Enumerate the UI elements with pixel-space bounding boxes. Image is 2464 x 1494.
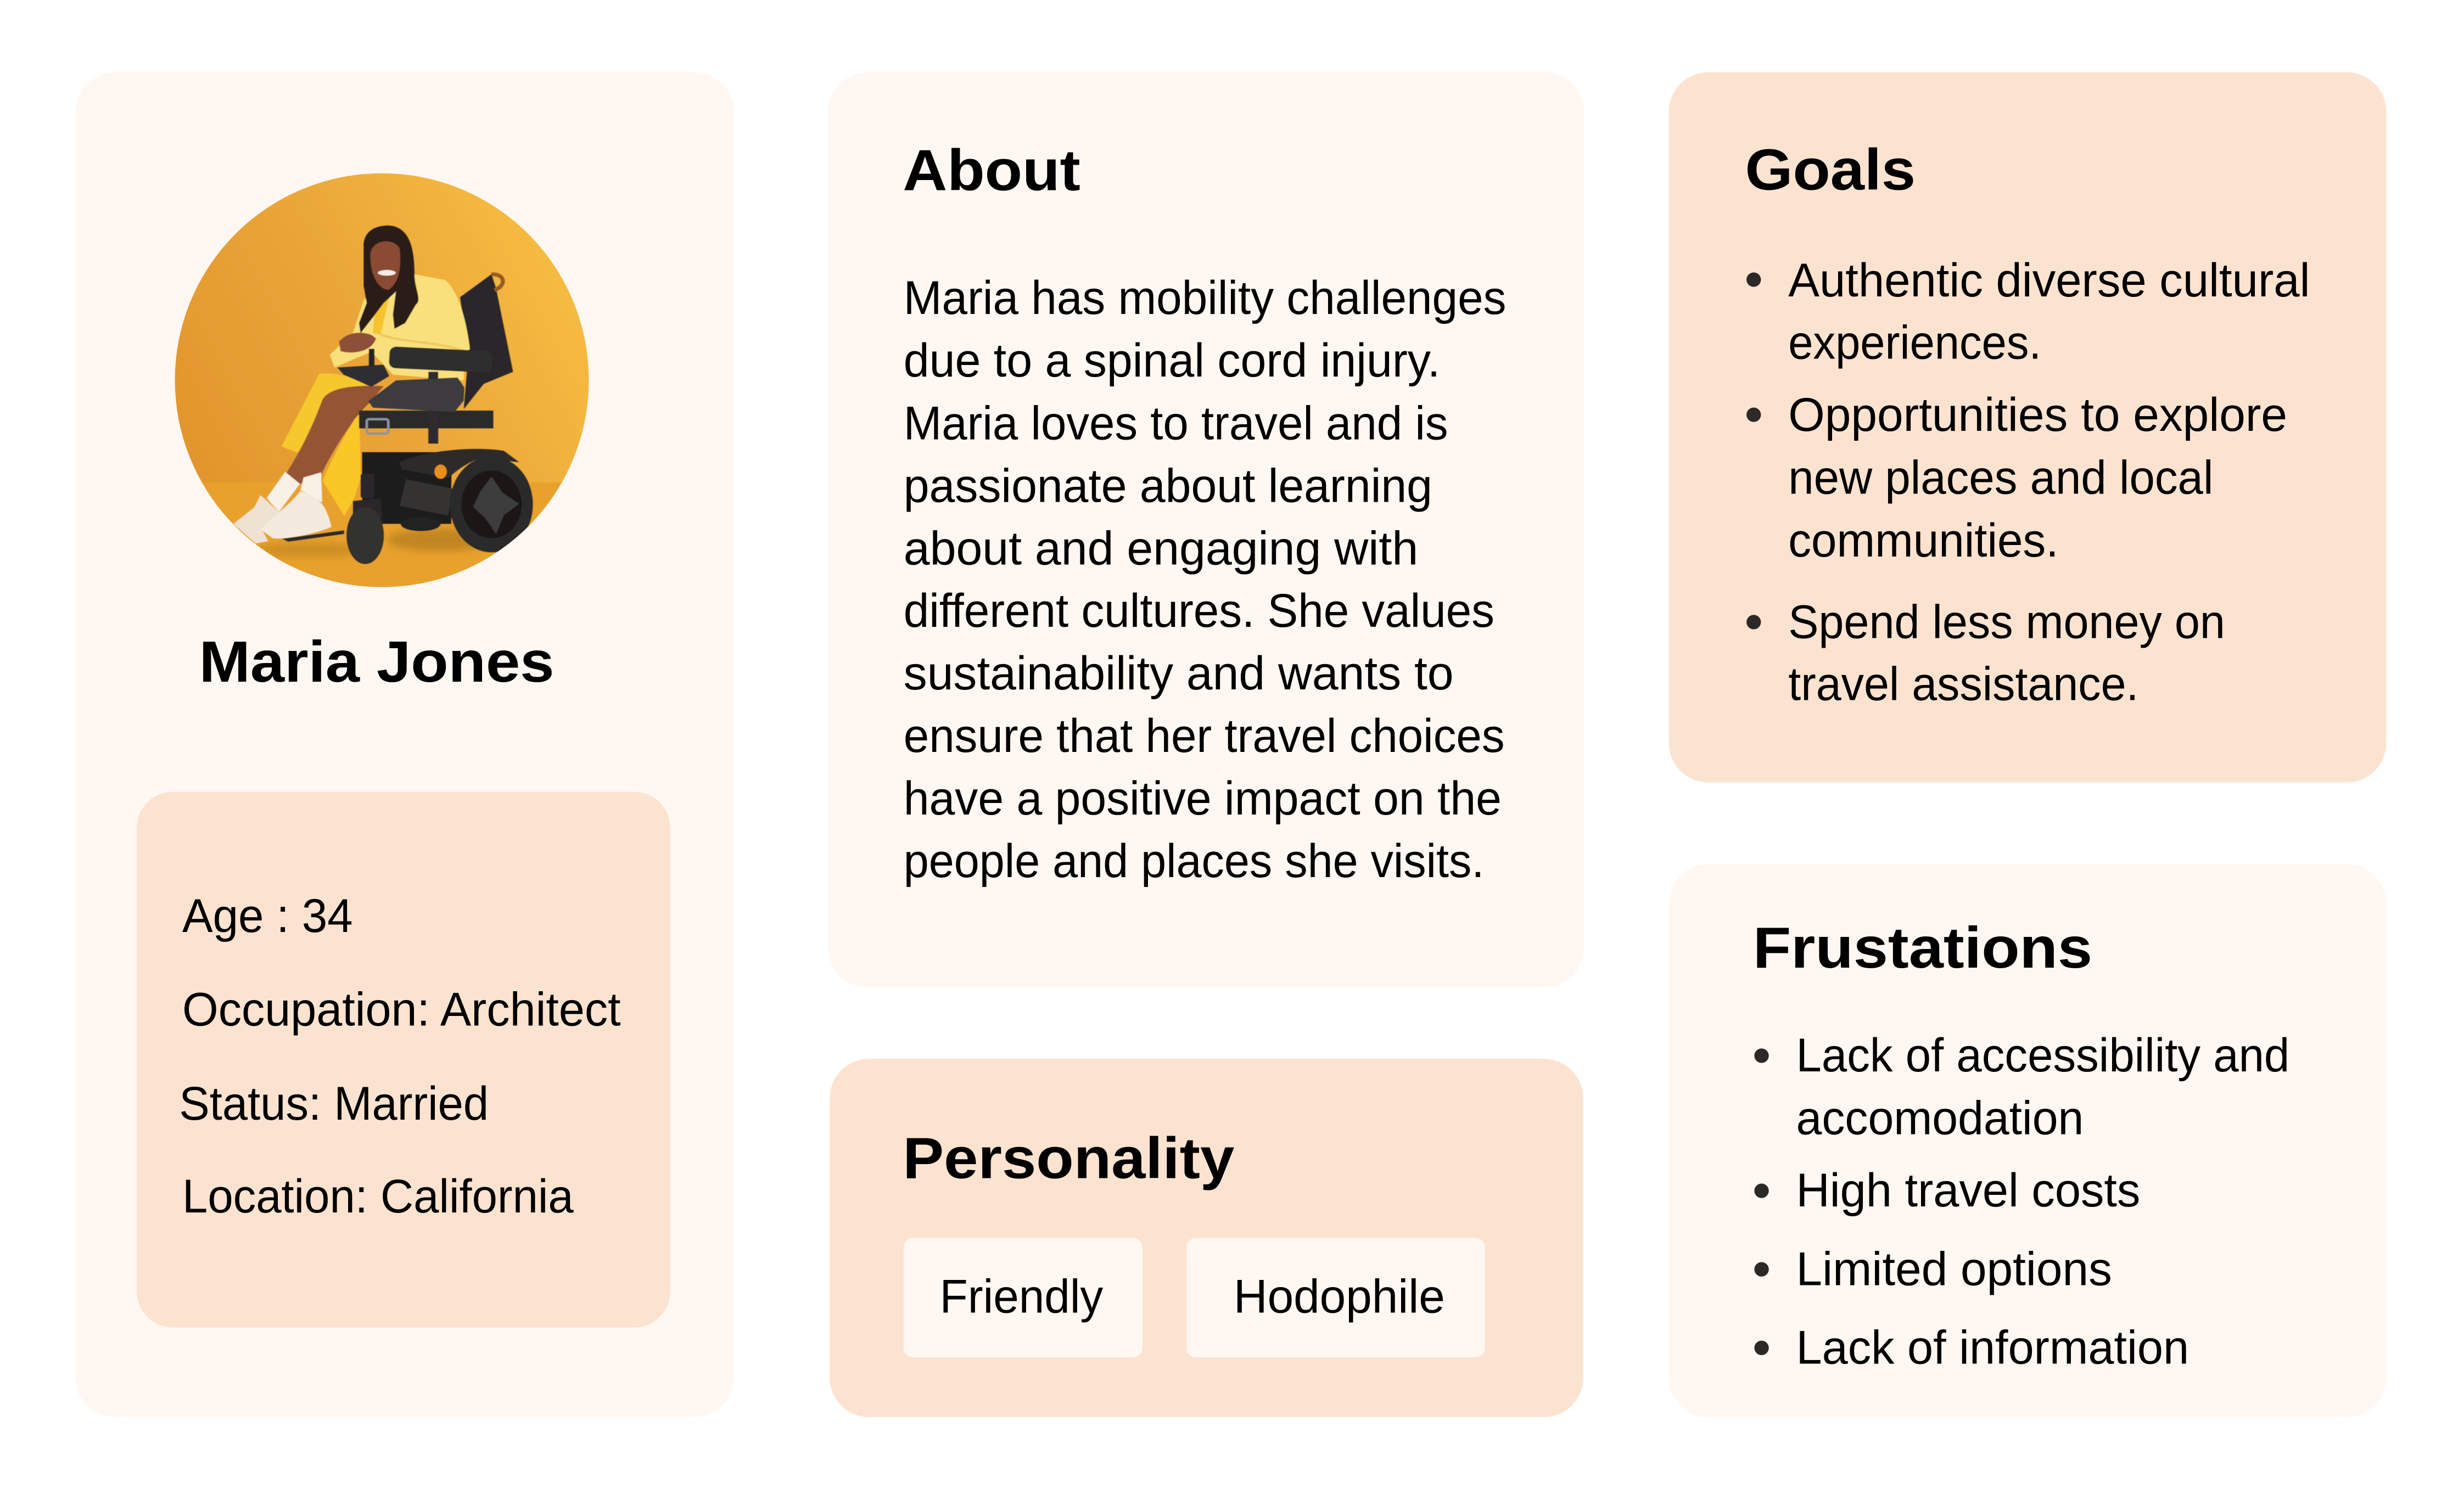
about paragraph: Maria has mobility challenges (904, 272, 1506, 324)
goal: explore: Opportunities to explore (1788, 389, 2287, 441)
tag: hodophile (1186, 1238, 1485, 1357)
frustration: information: Lack of information (1796, 1321, 2189, 1374)
tag: hodophile: Hodophile (1234, 1271, 1445, 1323)
about paragraph (904, 272, 1506, 888)
location: Location: California (182, 1170, 574, 1223)
about paragraph: due to a spinal cord injury. (904, 334, 1440, 387)
goal: cultural experiences (1746, 254, 2310, 369)
frustrations heading: Frustations (1753, 916, 2092, 980)
occupation: Occupation: Architect (182, 983, 621, 1036)
name: Maria Jones (199, 630, 555, 694)
goal: spend less (1746, 596, 2225, 710)
status: Status: Married (179, 1077, 489, 1130)
goals heading: Goals (1745, 137, 1916, 202)
frustration: accessibility (1754, 1029, 2289, 1145)
about paragraph: passionate about learning (904, 459, 1432, 512)
frustration: costs: High travel costs (1796, 1164, 2140, 1217)
about paragraph: people and places she visits. (904, 835, 1484, 888)
about paragraph: Maria loves to travel and is (904, 397, 1448, 450)
panel: goals (1669, 72, 2386, 782)
about heading: About (903, 138, 1080, 203)
about paragraph: different cultures. She values (904, 585, 1494, 637)
frustration: accessibility: Lack of accessibility and (1796, 1029, 2289, 1082)
goal: cultural experiences: experiences. (1788, 316, 2041, 369)
frustration: accessibility: accomodation (1796, 1092, 2084, 1145)
goal: cultural experiences: Authentic diverse cultural (1788, 254, 2310, 307)
about paragraph: about and engaging with (904, 522, 1418, 575)
goal: explore: new places and local (1788, 452, 2213, 504)
about paragraph: have a positive impact on the (904, 772, 1502, 825)
panel: demographic details (137, 792, 670, 1328)
goal: spend less: Spend less money on (1788, 596, 2225, 649)
goal: explore: communities. (1788, 514, 2059, 567)
panel: personality (830, 1059, 1583, 1417)
goal: spend less: travel assistance. (1788, 658, 2139, 710)
frustration: options: Limited options (1796, 1243, 2112, 1295)
panel: frustrations (1669, 864, 2386, 1417)
about paragraph: sustainability and wants to (904, 647, 1454, 700)
tag: friendly: Friendly (940, 1271, 1103, 1323)
photo: Maria in wheelchair (165, 165, 600, 599)
goal: explore (1746, 389, 2287, 567)
panel: about (828, 72, 1584, 987)
tag: friendly (904, 1238, 1143, 1357)
personality heading: Personality (903, 1126, 1234, 1191)
panel: profile (75, 72, 734, 1417)
about paragraph: ensure that her travel choices (904, 710, 1505, 762)
age: Age : 34 (182, 890, 353, 942)
